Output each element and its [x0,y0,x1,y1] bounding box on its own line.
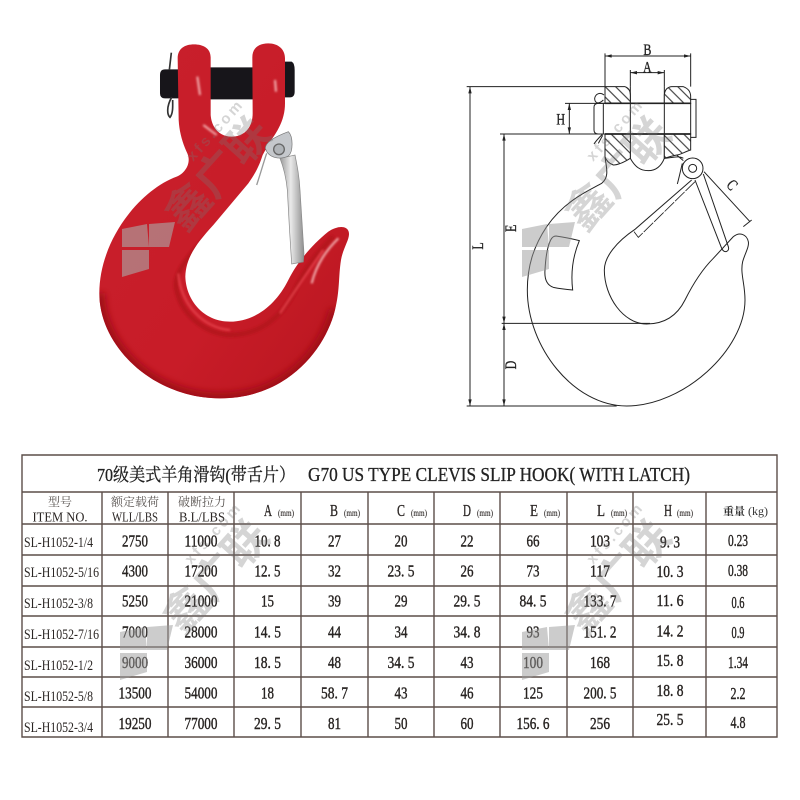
inner rim [176,233,333,335]
cotter pin [594,93,604,144]
row SL-H1052-5/8: 125 [523,684,543,702]
row SL-H1052-1/4: 66 [526,532,540,550]
watermark over table left: xfs.com [181,499,246,568]
row SL-H1052-7/16: 0.9 [732,623,744,642]
row SL-H1052-1/4: 0.23 [728,531,748,550]
row SL-H1052-3/4: 50 [394,714,408,733]
hook body [99,43,349,398]
clevis slot [630,87,664,171]
watermark over drawing: 鑫广联 [547,101,683,242]
lower edge shadow [99,293,335,398]
table frame and grid [22,455,777,737]
table header row: (mm) [477,508,493,519]
row SL-H1052-5/16: 32 [328,562,341,580]
rim highlight [178,250,323,330]
watermark over table left [120,499,281,680]
table header row: (mm) [278,508,294,519]
row SL-H1052-1/4: 22 [460,532,474,550]
row SL-H1052-1/4: 2750 [122,532,148,550]
row SL-H1052-5/8: 200. 5 [584,684,616,702]
row SL-H1052-5/8: SL-H1052-5/8 [24,689,93,705]
table header row: 额定载荷 [111,493,159,510]
watermark over hook photo: xfs.com [183,96,248,165]
row SL-H1052-1/4: 20 [394,532,408,550]
row SL-H1052-7/16: 34 [394,622,408,642]
row SL-H1052-3/8: 29 [394,592,408,610]
clevis pin [160,62,295,99]
row SL-H1052-5/8: 54000 [184,684,218,702]
row SL-H1052-1/4: 27 [328,532,341,550]
row SL-H1052-7/16: 34. 8 [454,622,480,642]
row SL-H1052-7/16: 44 [328,622,341,642]
row SL-H1052-3/4: 29. 5 [254,714,281,733]
row SL-H1052-5/16: 0.38 [728,561,748,580]
latch rivet [265,132,292,158]
table header row: (mm) [611,508,627,519]
row SL-H1052-5/16 [24,561,748,581]
row SL-H1052-3/4 [24,710,746,736]
table header row: 重量 [723,503,745,519]
table header row: ITEM NO. [32,510,88,526]
row SL-H1052-3/8: 29. 5 [454,592,480,610]
table title: 70级美式羊角滑钩(带舌片） [97,465,295,486]
row SL-H1052-5/16: 10. 3 [656,562,684,581]
row SL-H1052-5/8: 2.2 [730,684,746,703]
watermark over drawing [522,96,683,277]
table header row: (mm) [344,508,360,519]
row SL-H1052-5/8: 18. 8 [656,681,684,700]
table header row: A [264,501,272,520]
row SL-H1052-5/16: SL-H1052-5/16 [24,565,99,581]
table header row: 破断拉力 [178,493,226,510]
watermark over drawing: xfs.com [583,96,648,165]
row SL-H1052-1/2: 36000 [184,653,218,672]
watermark over hook photo [122,96,283,277]
row SL-H1052-3/4: 25. 5 [656,710,684,729]
row SL-H1052-1/4: 10. 8 [254,532,280,550]
table header row: D [463,501,471,520]
row SL-H1052-3/4: 81 [328,714,341,733]
table header row: WLL/LBS [112,510,158,526]
dimension lines [467,53,752,406]
watermark over table left: 鑫广联 [145,504,281,645]
row SL-H1052-1/4: 103 [590,532,610,550]
latch pivot eye [682,158,703,179]
hook outline [527,157,748,406]
table header row: (kg) [748,504,768,518]
row SL-H1052-3/4: 256 [590,714,610,733]
row SL-H1052-3/4: 19250 [118,714,152,733]
latch arm [677,163,729,252]
row SL-H1052-5/16: 4300 [122,562,148,580]
row SL-H1052-5/8 [24,681,746,705]
watermark over hook photo: 鑫广联 [147,101,283,242]
watermark over table right: xfs.com [583,499,648,568]
cotter pin [168,53,173,117]
row SL-H1052-3/8 [24,591,744,612]
dimension letters: C [722,176,741,194]
row SL-H1052-1/4: 9. 3 [660,532,680,552]
table header row: (mm) [677,508,693,519]
row SL-H1052-1/2: SL-H1052-1/2 [24,658,93,674]
row SL-H1052-5/8: 18 [261,684,274,702]
hook shading [99,77,338,398]
row SL-H1052-7/16: SL-H1052-7/16 [24,627,99,643]
row SL-H1052-1/2: 1.34 [728,653,748,672]
row SL-H1052-3/4: 77000 [184,714,218,733]
row SL-H1052-3/8: 84. 5 [520,592,546,610]
row SL-H1052-1/2: 100 [523,653,543,672]
table header row: (mm) [544,508,560,519]
body edge to eye [664,155,683,161]
dimension arrowheads [468,54,691,406]
row SL-H1052-1/2: 9000 [122,653,148,672]
table header row: H [664,501,672,520]
table header row: L [597,501,605,520]
row SL-H1052-7/16: 28000 [184,622,218,642]
row SL-H1052-7/16: 7000 [122,622,148,642]
latch dashed slot [634,182,695,237]
row SL-H1052-1/4 [24,531,748,552]
table header row: 型号 [48,493,72,510]
row SL-H1052-3/8: SL-H1052-3/8 [24,596,93,612]
row SL-H1052-3/8: 133. 7 [584,592,617,610]
technical drawing with dimensions [467,41,752,406]
row SL-H1052-3/4: 4.8 [730,713,746,732]
row SL-H1052-5/16: 17200 [184,562,218,580]
row SL-H1052-5/16: 12. 5 [254,562,280,580]
watermark over table right [522,499,683,680]
table header row: B.L/LBS [179,510,225,526]
table title [97,464,690,486]
row SL-H1052-5/8: 58. 7 [321,684,348,702]
pin heavy edges [605,103,691,134]
row SL-H1052-3/8: 0.6 [732,593,744,612]
table header row: (mm) [411,508,427,519]
pin [594,99,696,137]
row SL-H1052-7/16: 93 [526,622,540,642]
row SL-H1052-1/2: 168 [590,653,610,672]
row SL-H1052-5/16: 73 [526,562,540,580]
specification table [22,455,777,737]
row SL-H1052-3/8: 15 [261,592,274,610]
row SL-H1052-3/8: 21000 [184,592,218,610]
row SL-H1052-1/2: 43 [460,653,474,672]
row SL-H1052-7/16: 151. 2 [584,622,616,642]
row SL-H1052-3/8: 5250 [122,592,148,610]
row SL-H1052-5/8: 46 [460,684,474,702]
row SL-H1052-1/4: 11000 [184,532,218,550]
row SL-H1052-3/4: 60 [460,714,474,733]
dimension letters: H [556,111,565,129]
row SL-H1052-1/2: 48 [328,653,341,672]
row SL-H1052-1/2: 15. 8 [656,651,684,670]
row SL-H1052-1/2: 18. 5 [254,653,281,672]
row SL-H1052-7/16: 14. 2 [656,622,684,640]
photo: red clevis slip hook with latch [99,43,349,398]
specular highlights [197,77,338,283]
row SL-H1052-7/16: 14. 5 [254,622,281,642]
table title: G70 US TYPE CLEVIS SLIP HOOK( WITH LATCH) [308,464,690,486]
table header row: E [530,501,538,520]
latch spring [257,153,267,185]
table header row [32,493,768,526]
row SL-H1052-5/16: 117 [590,562,610,580]
row SL-H1052-3/4: 156. 6 [516,714,550,733]
row SL-H1052-3/4: SL-H1052-3/4 [24,720,93,736]
table header row: B [330,501,338,520]
clevis cheek sections [605,87,691,165]
dimension letters: L [469,242,488,250]
row SL-H1052-7/16 [24,622,744,643]
row SL-H1052-5/16: 26 [460,562,474,580]
row SL-H1052-5/8: 43 [394,684,408,702]
forging mark [545,236,579,290]
row SL-H1052-1/4: SL-H1052-1/4 [24,535,93,551]
dimension letters [469,41,741,369]
row SL-H1052-5/8: 13500 [118,684,152,702]
row SL-H1052-3/8: 39 [328,592,341,610]
row SL-H1052-1/2 [24,651,748,674]
dimension letters: B [643,41,651,60]
latch [280,155,304,264]
dimension letters: A [643,59,652,77]
dimension letters: D [502,361,521,369]
table header row: C [397,501,405,520]
dimension letters: E [502,225,521,232]
row SL-H1052-5/16: 23. 5 [388,562,414,580]
row SL-H1052-3/8: 11. 6 [656,591,684,610]
watermark over table right: 鑫广联 [547,504,683,645]
row SL-H1052-1/2: 34. 5 [388,653,414,672]
